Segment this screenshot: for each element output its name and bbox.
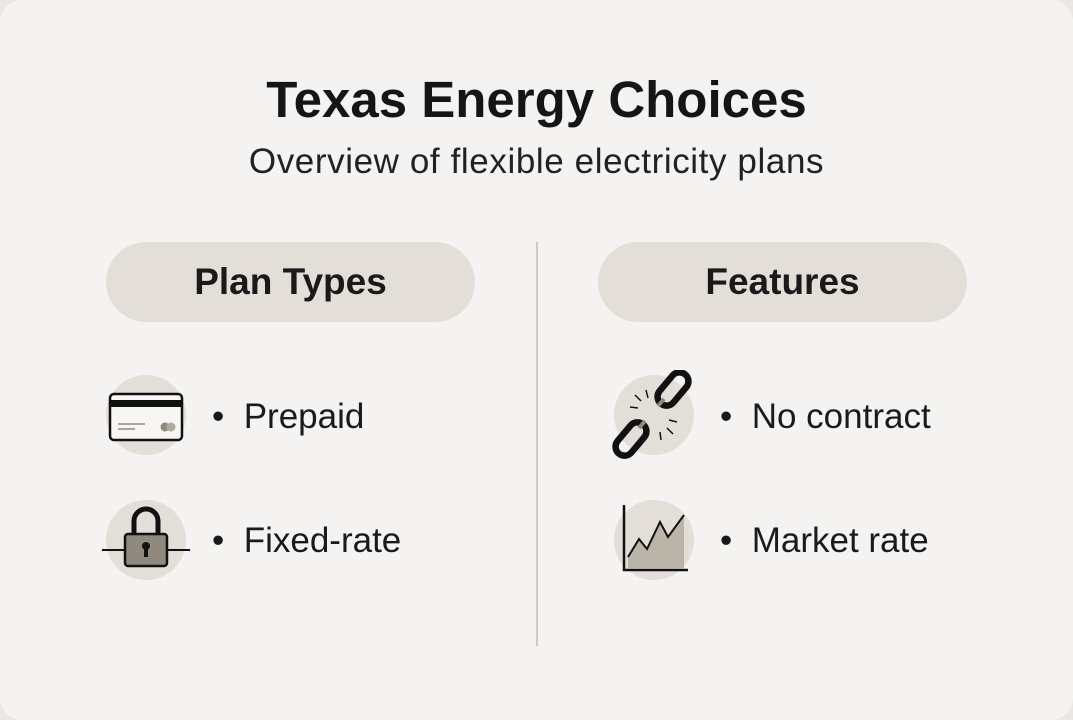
heading: plan types <box>106 242 475 322</box>
subtitle: Overview of flexible electricity plans <box>249 142 824 181</box>
heading: features <box>598 242 967 322</box>
item: no contract: • No contract <box>720 397 931 436</box>
icon: credit card <box>106 375 186 455</box>
divider <box>536 242 538 646</box>
heading: plan types: Plan Types <box>194 261 387 302</box>
icon: broken chain <box>612 370 694 459</box>
item: market rate: • Market rate <box>720 521 929 560</box>
icon: lock <box>102 500 190 580</box>
heading: features: Features <box>705 261 860 302</box>
item: prepaid: • Prepaid <box>212 397 364 436</box>
title: Texas Energy Choices <box>266 71 807 128</box>
icon: market chart <box>614 500 694 580</box>
item: fixed-rate: • Fixed-rate <box>212 521 401 560</box>
